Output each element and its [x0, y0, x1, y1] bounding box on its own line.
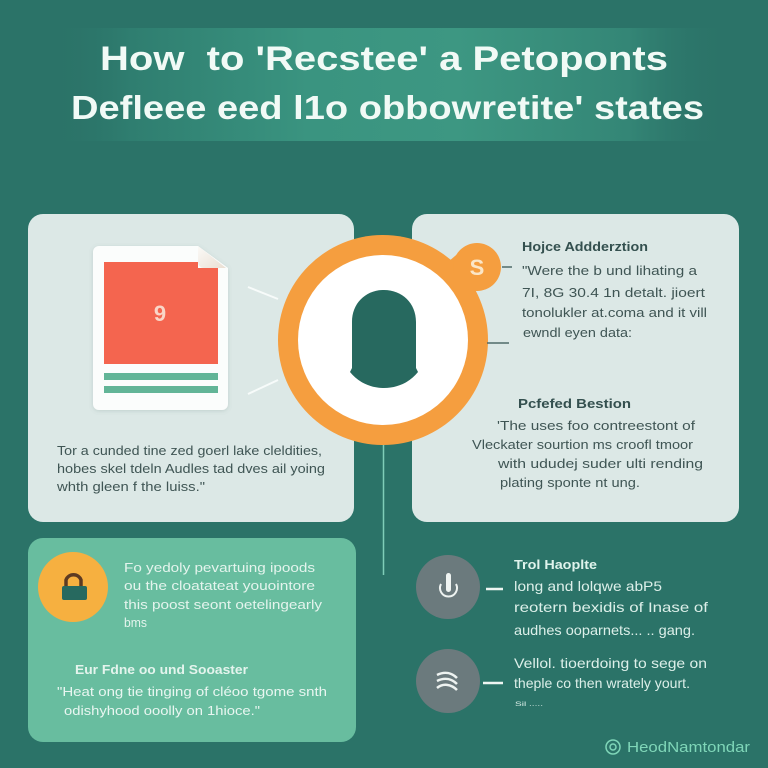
text: addition: tonolukler at.coma and it vill: [522, 305, 707, 320]
panel: green tips: [28, 538, 356, 742]
text: tips: [124, 560, 323, 630]
text: addition: [522, 263, 707, 340]
quote: tips: "Heat ong tie tinging of cléoo tgome snth: [57, 684, 327, 699]
panel text: [56, 443, 325, 494]
footer brand: HeodNamtondar: [627, 739, 750, 756]
title: Defleee eed l1o obbowretite' states: [71, 89, 704, 126]
badge: S: S: [470, 255, 484, 280]
item: signal: [416, 649, 707, 713]
text: tips: ou the cloatateat youointore: [124, 578, 315, 593]
text: tips: this poost seont oetelingearly: [124, 597, 323, 612]
text: addition: 7I, 8G 30.4 1n detalt. jioert: [522, 285, 705, 300]
panel text: Tor a cunded tine zed goerl lake cleldities,: [57, 443, 322, 458]
quote: tips: [57, 684, 327, 718]
panel text: whth gleen f the luiss.": [56, 479, 205, 494]
heading: addition: Hojce Addderztion: [522, 239, 648, 254]
text: tips: Fo yedoly pevartuing ipoods: [124, 560, 316, 575]
text: tips: bms: [124, 615, 147, 630]
icon: signal waves: [416, 649, 480, 713]
icon: document page: 9: [154, 301, 166, 326]
text: item two: Sil .....: [515, 702, 544, 708]
connector lines: [248, 287, 278, 394]
text: addition: "Were the b und lihating a: [522, 263, 698, 278]
icon: keyhole: [350, 290, 418, 388]
text: station: with ududej suder ulti rending: [497, 456, 703, 471]
header band: [50, 28, 730, 141]
title: How to 'Recstee' a Petoponts: [100, 40, 668, 78]
icon: padlock: [38, 552, 108, 622]
text: station: [472, 418, 703, 490]
connector lines: [487, 267, 512, 343]
text: station: plating sponte nt ung.: [500, 475, 640, 490]
icon: document page: [93, 246, 228, 410]
text: item one: reotern bexidis of Inase of: [514, 599, 708, 615]
text: station: Vleckater sourtion ms croofl tmoor: [472, 437, 694, 452]
central keyhole emblem: [278, 235, 512, 575]
text: item one: [514, 578, 708, 638]
heading: item one: Trol Haoplte: [514, 557, 597, 572]
item: microphone: [416, 555, 708, 638]
heading: tips: Eur Fdne oo und Sooaster: [75, 662, 248, 677]
text: item two: theple co then wrately yourt.: [514, 675, 690, 691]
text: station: 'The uses foo contreestont of: [497, 418, 695, 433]
heading: station: Pcfefed Bestion: [518, 396, 631, 411]
icon: microphone: [416, 555, 480, 619]
icon: brand mark: [606, 740, 620, 754]
panel text: hobes skel tdeln Audles tad dves ail yoing: [57, 461, 325, 476]
quote: tips: odishyhood ooolly on 1hioce.": [64, 703, 260, 718]
panel: addition and station: [412, 214, 739, 522]
text: item two: [514, 655, 707, 708]
title: [71, 40, 704, 126]
text: item one: audhes ooparnets... .. gang.: [514, 622, 695, 638]
text: addition: ewndl eyen data:: [523, 325, 632, 340]
badge: S: [448, 243, 501, 291]
text: item two: Vellol. tioerdoing to sege on: [514, 655, 707, 671]
panel: document: [28, 214, 354, 522]
text: item one: long and lolqwe abP5: [514, 578, 662, 594]
